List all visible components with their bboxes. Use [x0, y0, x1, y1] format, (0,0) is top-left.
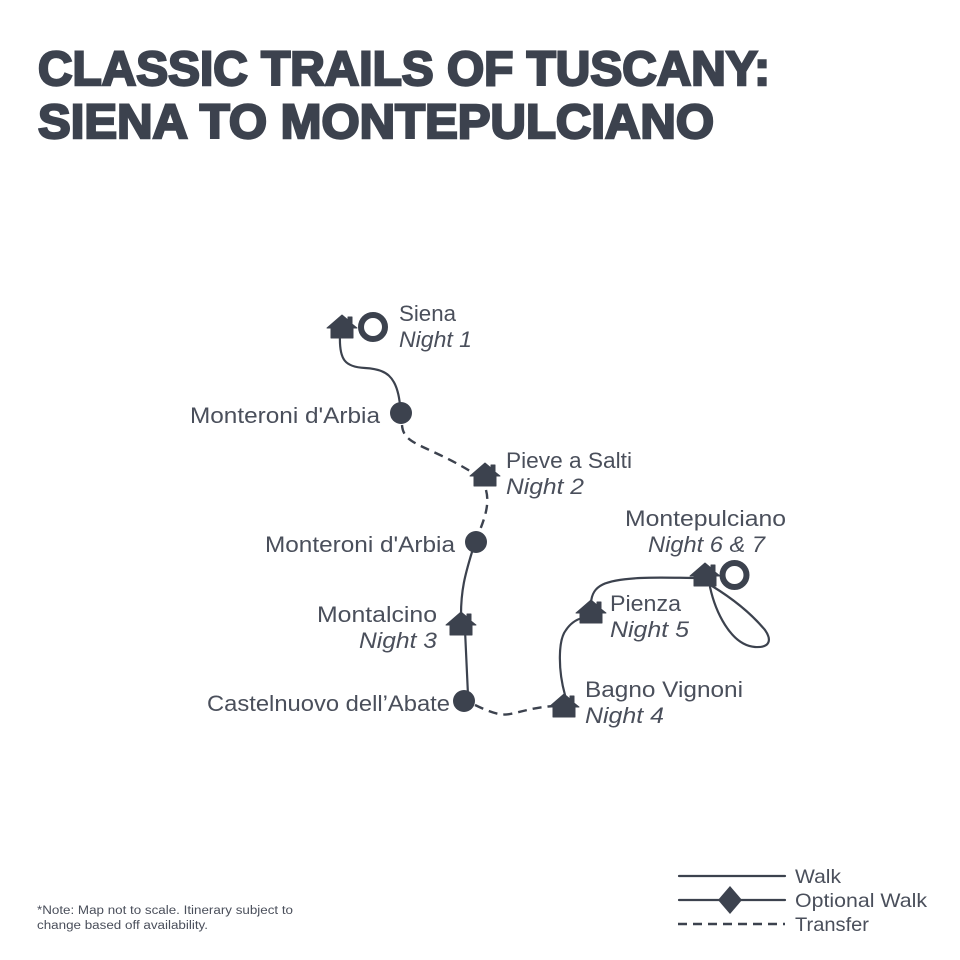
label: Siena: Siena — [399, 301, 457, 326]
label: Castelnuovo dell'Abate: Castelnuovo dell’Abate — [207, 691, 450, 716]
label: Montalcino: Montalcino — [317, 602, 437, 627]
label: Monteroni d'Arbia second: Monteroni d'Arbia — [265, 532, 456, 557]
label: Pieve a Salti: Night 2 — [506, 474, 584, 499]
icon: house Pienza — [576, 600, 606, 623]
label: Montepulciano: Montepulciano — [625, 506, 786, 531]
label: Bagno Vignoni — [585, 677, 743, 728]
label: Montepulciano — [625, 506, 786, 557]
label: Siena — [399, 301, 472, 352]
legend: optional walk — [679, 886, 927, 914]
legend: optional walk: Optional Walk — [795, 890, 927, 912]
label: Monteroni d'Arbia: Monteroni d'Arbia — [190, 403, 381, 428]
icon: ring Montepulciano end — [722, 563, 746, 587]
icon: house Pieve a Salti — [470, 463, 500, 486]
stop: Monteroni d'Arbia second marker — [465, 531, 487, 553]
label: Pienza — [610, 591, 690, 642]
icon: ring Siena start — [361, 315, 385, 339]
footnote: change based off availability. — [37, 920, 208, 932]
label: Bagno Vignoni: Bagno Vignoni — [585, 677, 743, 702]
label: Siena: Night 1 — [399, 327, 472, 352]
icon: house Montepulciano — [690, 563, 720, 586]
walk: Montepulciano loop — [710, 586, 769, 647]
walk: Monteroni d'Arbia to Montalcino — [461, 552, 472, 615]
title — [38, 43, 770, 149]
label: Pienza: Night 5 — [610, 617, 690, 642]
transfer: Pieve a Salti to Monteroni d'Arbia — [478, 490, 487, 535]
icon: house Bagno Vignoni — [549, 694, 579, 717]
walk: Montalcino to Castelnuovo dell'Abate — [465, 630, 468, 695]
stop: Monteroni d'Arbia marker — [390, 402, 412, 424]
icon: house Montalcino — [446, 612, 476, 635]
label: Pieve a Salti — [506, 448, 632, 499]
icon: house Siena — [327, 315, 357, 338]
title: SIENA TO MONTEPULCIANO — [38, 96, 714, 149]
walk: Pienza to Montepulciano — [591, 578, 700, 603]
walk: Bagno Vignoni to Pienza — [560, 618, 582, 695]
route map — [190, 301, 786, 728]
stop: Castelnuovo dell'Abate marker — [453, 690, 475, 712]
legend — [678, 866, 927, 936]
label: Bagno Vignoni: Night 4 — [585, 703, 664, 728]
footnote — [37, 905, 293, 932]
label: Montepulciano: Night 6 & 7 — [648, 532, 766, 557]
transfer: Castelnuovo dell'Abate to Bagno Vignoni — [475, 705, 555, 715]
transfer: Monteroni d'Arbia to Pieve a Salti — [402, 425, 475, 474]
legend: transfer: Transfer — [795, 914, 870, 936]
label: Pieve a Salti: Pieve a Salti — [506, 448, 632, 473]
label: Montalcino — [317, 602, 438, 653]
legend: walk: Walk — [795, 866, 841, 888]
title: CLASSIC TRAILS OF TUSCANY: — [38, 43, 770, 96]
label: Montalcino: Night 3 — [359, 628, 438, 653]
footnote: *Note: Map not to scale. Itinerary subject to — [37, 905, 293, 917]
walk: Siena to Monteroni d'Arbia — [340, 335, 400, 405]
label: Pienza: Pienza — [610, 591, 682, 616]
